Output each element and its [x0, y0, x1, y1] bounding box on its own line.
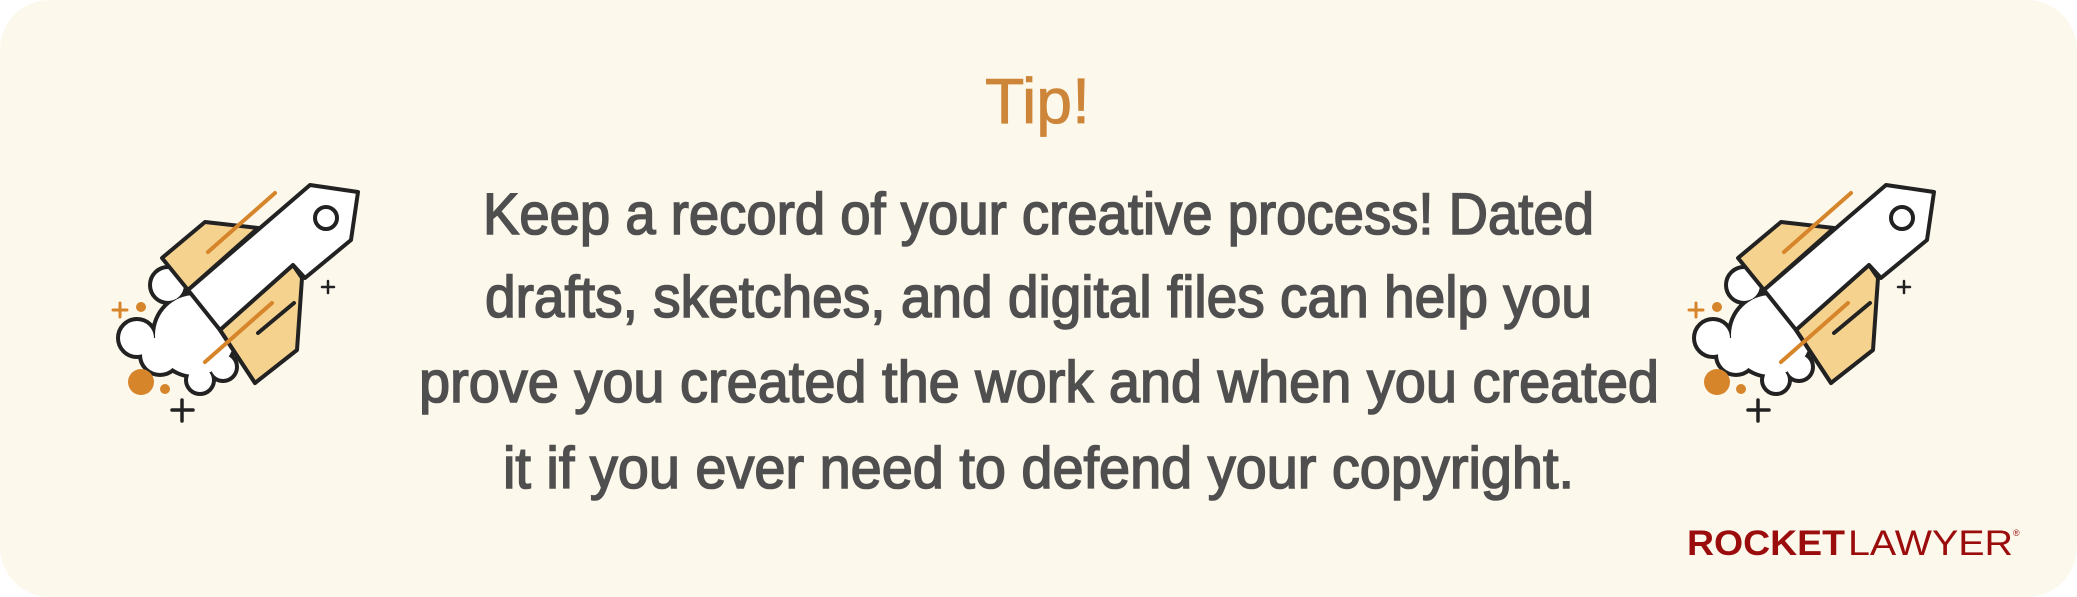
title: Tip!: [985, 65, 1090, 137]
logo: Rocket Lawyer: LAWYER: [1848, 524, 2013, 563]
logo: Rocket Lawyer: ®: [2013, 528, 2020, 538]
icon: rocket left: [113, 185, 358, 421]
logo: Rocket Lawyer: ROCKET: [1687, 524, 1845, 563]
body text: [419, 182, 1659, 501]
body text: Keep a record of your creative process! Dated: [483, 182, 1594, 247]
logo: Rocket Lawyer: [1687, 524, 2020, 563]
body text: drafts, sketches, and digital files can help you: [485, 265, 1592, 330]
icon: rocket right: [1689, 185, 1934, 421]
body text: it if you ever need to defend your copyright.: [503, 436, 1574, 501]
body text: prove you created the work and when you created: [419, 350, 1659, 415]
